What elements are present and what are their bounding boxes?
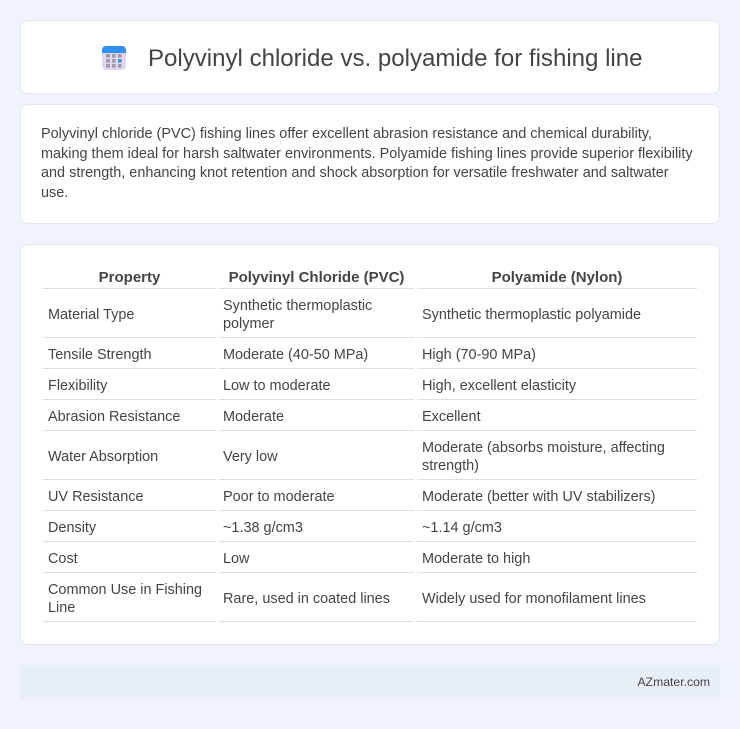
row: cost: Low (223, 551, 250, 567)
row: tensile strength: Moderate (40-50 MPa) (223, 347, 368, 363)
table header: Polyvinyl Chloride (PVC) (229, 269, 404, 286)
row: density: ~1.38 g/cm3 (223, 520, 303, 536)
row: common use (48, 582, 646, 616)
table header: Property (99, 269, 160, 286)
footer brand: AZmater.com (638, 675, 710, 689)
row: water absorption: strength) (422, 458, 479, 474)
row: flexibility: High, excellent elasticity (422, 378, 576, 394)
row: uv resistance: Moderate (better with UV stabilizers) (422, 489, 656, 505)
row: uv resistance: UV Resistance (48, 489, 144, 505)
summary text: use. (41, 185, 68, 201)
panel: summary (20, 104, 720, 224)
row: abrasion resistance: Excellent (422, 409, 481, 425)
row: density: ~1.14 g/cm3 (422, 520, 502, 536)
summary text: Polyvinyl chloride (PVC) fishing lines offer excellent abrasion resistance and chemical durability, (41, 126, 652, 142)
row: common use: Common Use in Fishing (48, 582, 202, 598)
summary text (41, 126, 693, 201)
row: water absorption: Very low (223, 449, 278, 465)
table header (99, 269, 622, 286)
row: abrasion resistance: Moderate (223, 409, 284, 425)
row: flexibility: Flexibility (48, 378, 107, 394)
row: material type (48, 298, 641, 332)
row: tensile strength: High (70-90 MPa) (422, 347, 536, 363)
footer bar (20, 665, 720, 699)
icon: calendar (102, 46, 126, 70)
row: uv resistance (48, 489, 656, 505)
row: common use: Widely used for monofilament lines (422, 591, 646, 607)
row: material type: Material Type (48, 307, 134, 323)
row: uv resistance: Poor to moderate (223, 489, 335, 505)
row: density: Density (48, 520, 96, 536)
row: density (48, 520, 502, 536)
summary text: making them ideal for harsh saltwater environments. Polyamide fishing lines provide superior flexibility (41, 146, 693, 162)
row: common use: Line (48, 600, 75, 616)
row: abrasion resistance: Abrasion Resistance (48, 409, 180, 425)
row: flexibility (48, 378, 576, 394)
row: cost: Cost (48, 551, 78, 567)
row: common use: Rare, used in coated lines (223, 591, 390, 607)
row: water absorption: Moderate (absorbs moisture, affecting (422, 440, 665, 456)
row: flexibility: Low to moderate (223, 378, 331, 394)
title text: Polyvinyl chloride vs. polyamide for fishing line (148, 45, 643, 72)
table header: Polyamide (Nylon) (492, 269, 622, 286)
row: material type: Synthetic thermoplastic (223, 298, 372, 314)
row: water absorption: Water Absorption (48, 449, 158, 465)
row: cost (48, 551, 530, 567)
row: tensile strength: Tensile Strength (48, 347, 152, 363)
row: abrasion resistance (48, 409, 481, 425)
panel: title (20, 20, 720, 94)
row: cost: Moderate to high (422, 551, 530, 567)
summary text: and strength, enhancing knot retention and shock absorption for versatile freshwater and saltwater (41, 165, 669, 181)
row: water absorption (48, 440, 665, 474)
row: tensile strength (48, 347, 536, 363)
row: material type: Synthetic thermoplastic polyamide (422, 307, 641, 323)
row: material type: polymer (223, 316, 274, 332)
panel: comparison table (20, 244, 720, 645)
